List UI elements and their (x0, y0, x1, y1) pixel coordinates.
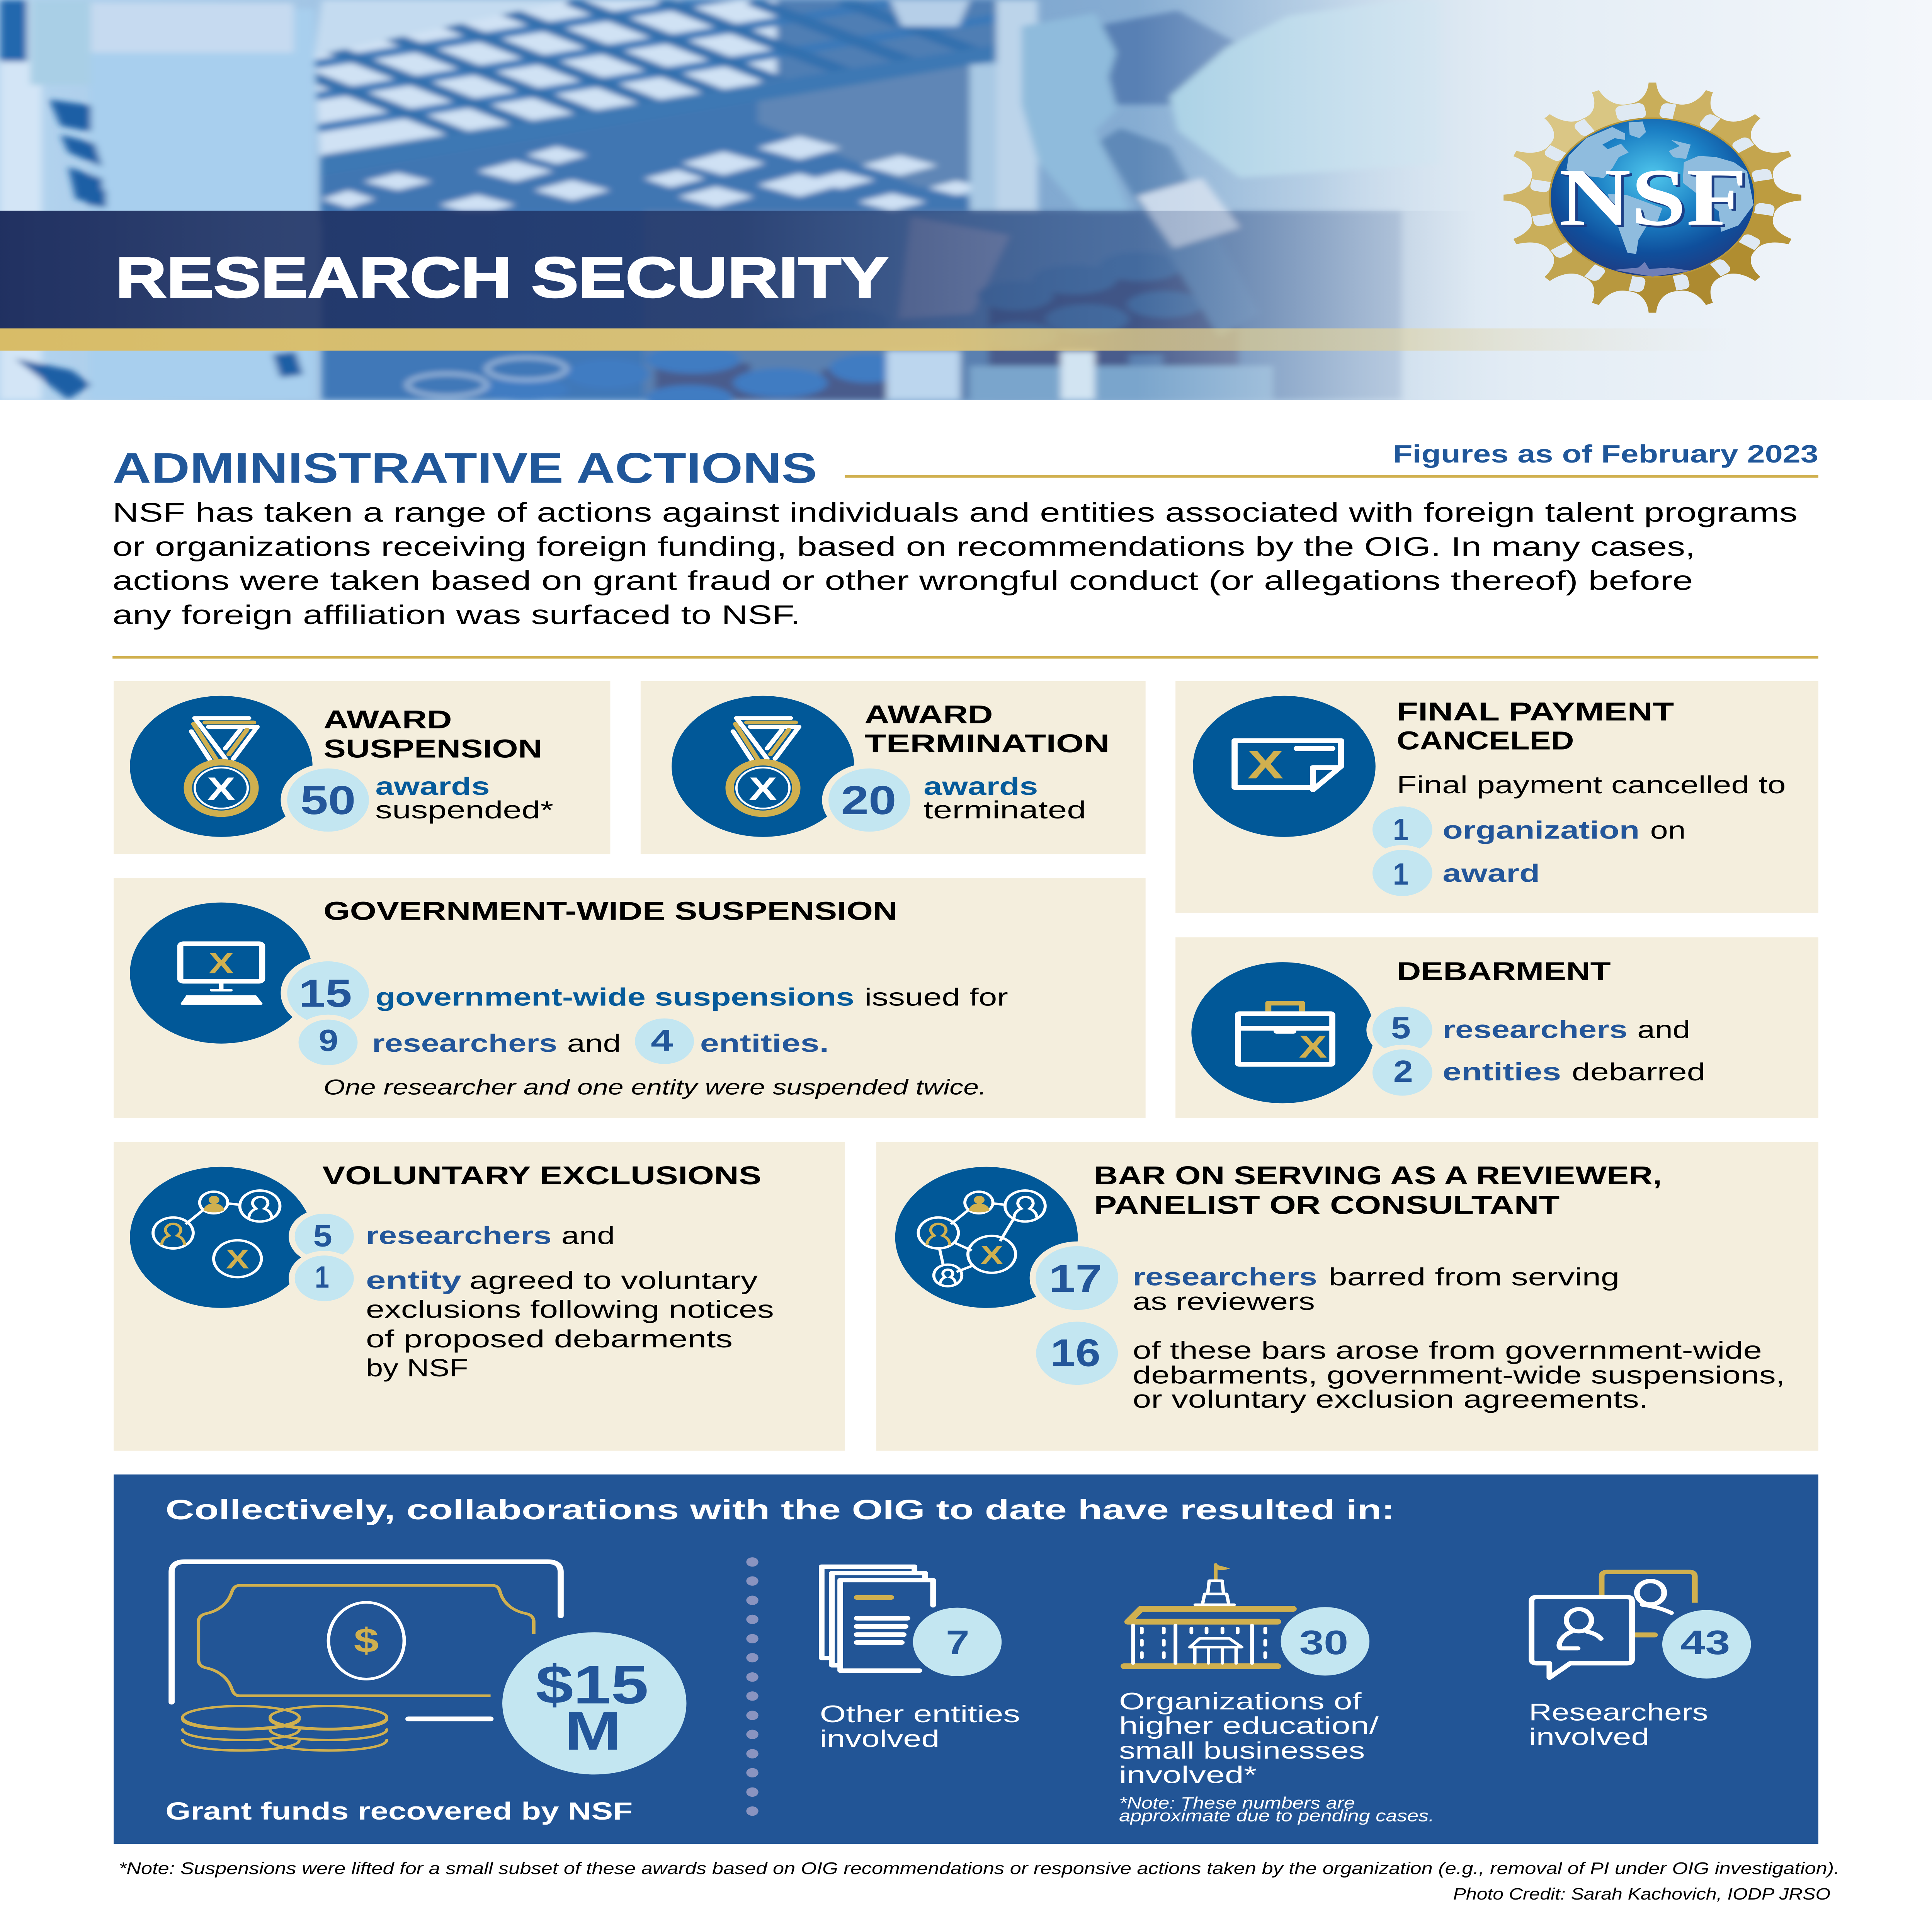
panel: final payment canceled (1175, 681, 1818, 913)
intro paragraph (112, 498, 1798, 630)
text: suspended* (376, 796, 553, 824)
labels: award (1442, 859, 1540, 887)
panel: debarment (1175, 937, 1818, 1118)
numbers: 2 (1393, 1054, 1413, 1088)
text: government-wide suspensions (376, 983, 854, 1011)
text: One researcher and one entity were suspended twice. (323, 1075, 986, 1099)
text: researchers (1442, 1015, 1628, 1043)
number: $15 M (536, 1654, 648, 1761)
text: or voluntary exclusion agreements. (1133, 1385, 1648, 1413)
icon: network: X (980, 1240, 1003, 1270)
note: approximate due to pending cases. (1119, 1807, 1434, 1825)
numbers (1391, 1011, 1413, 1088)
footnote: *Note: Suspensions were lifted for a small subset of these awards based on OIG recommendations or responsive actions taken by the organization (e.g., removal of PI under OIG investigation). (119, 1859, 1840, 1878)
number: $15 M: $15 (536, 1654, 648, 1715)
text: entity (366, 1266, 461, 1294)
labels: organization (1442, 816, 1639, 844)
NSF logo: NSF (1559, 152, 1747, 243)
panel: voluntary exclusions (114, 1142, 845, 1451)
header photo banner (0, 0, 1932, 411)
icon: canceled check: X (1247, 743, 1284, 787)
note (1119, 1794, 1434, 1825)
icon: computer (180, 944, 262, 1005)
heading: FINAL PAYMENT (1397, 697, 1674, 726)
intro paragraph: NSF has taken a range of actions against individuals and entities associated with foreign talent programs (112, 498, 1798, 528)
heading: TERMINATION (864, 729, 1110, 758)
numbers: 9 (319, 1024, 338, 1058)
label: Grant funds recovered by NSF (165, 1797, 633, 1825)
text: of proposed debarments (366, 1325, 733, 1353)
text: Final payment cancelled to (1397, 771, 1786, 799)
intro paragraph: any foreign affiliation was surfaced to NSF. (112, 600, 801, 630)
panel: award suspension (114, 681, 610, 854)
photo credit: Photo Credit: Sarah Kachovich, IODP JRSO (1453, 1885, 1830, 1903)
text (1133, 1263, 1785, 1413)
text: and (1637, 1015, 1690, 1043)
panel: government-wide suspension (114, 878, 1146, 1118)
text (366, 1221, 774, 1382)
heading: Collectively, collaborations with the OIG to date have resulted in: (165, 1494, 1395, 1525)
section heading: ADMINISTRATIVE ACTIONS (112, 444, 817, 492)
number: 50: 50 (300, 778, 356, 823)
text: awards (376, 772, 490, 800)
labels (1442, 816, 1686, 887)
label: involved (1529, 1724, 1650, 1750)
icon: canceled check (1235, 741, 1341, 790)
icon: money (172, 1562, 561, 1750)
heading: BAR ON SERVING AS A REVIEWER, (1094, 1161, 1662, 1190)
text: researchers (372, 1029, 557, 1057)
heading: CANCELED (1397, 726, 1574, 755)
icon: researchers (1532, 1572, 1695, 1678)
number: 20: 20 (841, 778, 896, 823)
panel: award termination (641, 681, 1146, 854)
icon: medal: X (207, 770, 235, 807)
icon: network: X (226, 1244, 249, 1274)
number: 30: 30 (1299, 1624, 1348, 1662)
text (1442, 1015, 1706, 1086)
text (323, 983, 1008, 1099)
icon: medal (730, 718, 799, 814)
numbers: 17 (1049, 1257, 1102, 1300)
label: involved (820, 1726, 939, 1752)
numbers (1049, 1257, 1102, 1374)
number: 7: 7 (946, 1624, 969, 1662)
text: agreed to voluntary (469, 1267, 758, 1294)
text: by NSF (366, 1354, 468, 1382)
icon: building (1124, 1565, 1293, 1666)
icon: computer: X (209, 947, 234, 980)
icon: medal: X (749, 770, 777, 807)
heading (864, 700, 1110, 758)
heading: SUSPENSION (323, 735, 542, 763)
labels: on (1650, 816, 1686, 844)
text: of these bars arose from government-wide (1133, 1337, 1762, 1364)
heading: PANELIST OR CONSULTANT (1094, 1191, 1560, 1219)
text (376, 772, 553, 824)
text: and (561, 1222, 615, 1250)
panel: collective results (114, 1475, 1818, 1844)
heading: VOLUNTARY EXCLUSIONS (322, 1161, 762, 1190)
heading: AWARD (864, 700, 993, 729)
icon: medal (188, 718, 257, 814)
label: Researchers (1529, 1699, 1708, 1726)
icon: network (153, 1190, 280, 1277)
numbers (1393, 813, 1408, 891)
text: terminated (923, 796, 1086, 824)
numbers: 4 (651, 1024, 673, 1058)
numbers: 1 (315, 1260, 329, 1294)
numbers (313, 1219, 332, 1294)
text (923, 772, 1086, 824)
icon: documents (821, 1567, 933, 1670)
heading: GOVERNMENT-WIDE SUSPENSION (323, 897, 898, 925)
heading (323, 705, 542, 763)
NSF logo: NSF (1561, 154, 1750, 245)
numbers (299, 971, 673, 1058)
icon: briefcase (1238, 1003, 1332, 1065)
text: and (567, 1029, 621, 1057)
text: debarred (1572, 1058, 1706, 1086)
label: Organizations of (1119, 1688, 1362, 1715)
label (1119, 1688, 1379, 1788)
text: debarments, government-wide suspensions, (1133, 1361, 1785, 1389)
heading (1094, 1161, 1662, 1219)
text: researchers (366, 1221, 551, 1250)
heading: AWARD (323, 705, 452, 734)
numbers: 1 (1393, 813, 1408, 847)
text: exclusions following notices (366, 1296, 774, 1323)
number: $15 M: M (565, 1700, 621, 1761)
icon: briefcase: X (1299, 1029, 1327, 1065)
label: higher education/ (1119, 1713, 1379, 1739)
NSF logo (1500, 80, 1805, 315)
numbers: 16 (1051, 1331, 1100, 1374)
numbers: 5 (313, 1219, 332, 1253)
text: issued for (864, 983, 1008, 1011)
heading (1397, 697, 1674, 755)
text: researchers (1133, 1263, 1317, 1291)
label (1529, 1699, 1708, 1750)
icon: money: $ (354, 1621, 379, 1660)
number: 43: 43 (1680, 1624, 1730, 1662)
text: barred from serving (1328, 1263, 1619, 1291)
title banner (0, 211, 1735, 351)
text: entities. (700, 1029, 829, 1057)
title: RESEARCH SECURITY (116, 246, 888, 310)
numbers: 15 (299, 971, 352, 1015)
note: *Note: These numbers are (1119, 1794, 1355, 1812)
numbers: 5 (1391, 1011, 1411, 1045)
label: involved* (1119, 1762, 1257, 1788)
text: awards (923, 772, 1038, 800)
intro paragraph: or organizations receiving foreign funding, based on recommendations by the OIG. In many cases, (112, 532, 1695, 562)
panel: bar on serving (876, 1142, 1818, 1451)
text: as reviewers (1133, 1287, 1315, 1315)
heading: DEBARMENT (1397, 957, 1611, 986)
date note: Figures as of February 2023 (1393, 440, 1818, 468)
label: Other entities (820, 1701, 1020, 1728)
label: small businesses (1119, 1737, 1365, 1764)
label (820, 1701, 1020, 1752)
text: entities (1442, 1058, 1561, 1086)
intro paragraph: actions were taken based on grant fraud or other wrongful conduct (or allegations thereof) before (112, 566, 1693, 596)
numbers: 1 (1393, 857, 1408, 891)
icon: network (918, 1190, 1045, 1286)
